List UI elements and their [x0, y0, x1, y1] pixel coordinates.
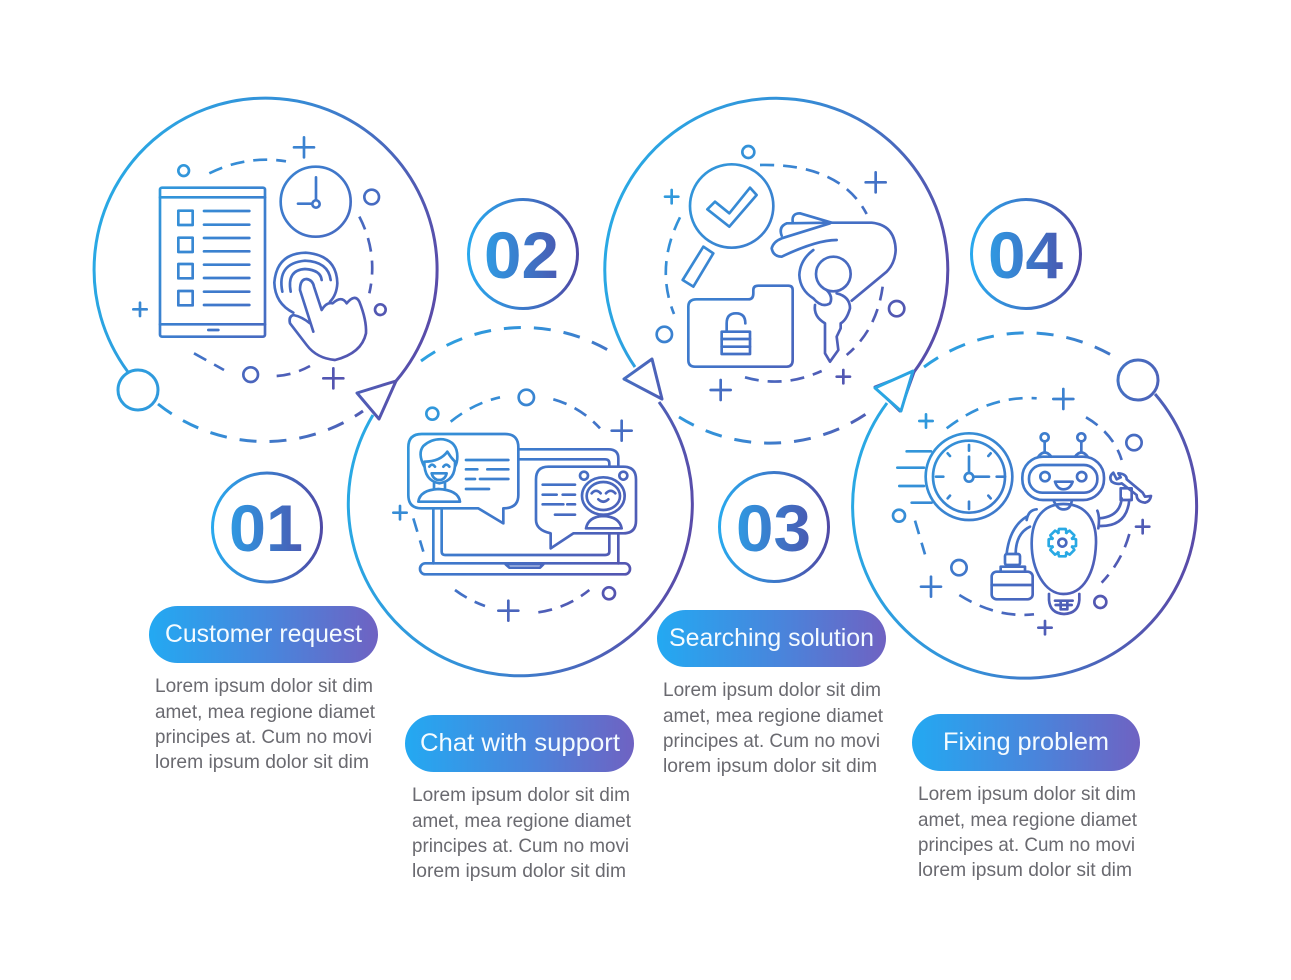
number badge 03: 03: [736, 491, 811, 565]
text block: step 2 description: Lorem ipsum dolor sit dim: [412, 784, 630, 806]
text block: step 2 description: principes at. Cum no movi: [412, 835, 629, 857]
pill: fixing problem: Fixing problem: [943, 728, 1109, 756]
icon: laptop chat: [393, 390, 636, 621]
number badge 01: 01: [229, 491, 303, 565]
panel: step 1 customer request: [94, 98, 437, 773]
arrow: step 4: [875, 371, 913, 411]
text block: step 4 description: amet, mea regione diamet: [918, 809, 1138, 831]
arrow: step 1: [357, 381, 396, 419]
text block: step 3 description: amet, mea regione diamet: [663, 705, 884, 727]
text block: step 2 description: amet, mea regione diamet: [412, 810, 632, 832]
ring: step 2: [348, 328, 692, 676]
number badge 02: 02: [484, 218, 559, 292]
text block: step 4 description: Lorem ipsum dolor sit dim: [918, 783, 1136, 805]
text block: step 1 description: lorem ipsum dolor sit dim: [155, 751, 369, 773]
number badge 01: [212, 473, 322, 582]
text block: step 3 description: [663, 679, 884, 777]
panel: step 4 fixing problem: [853, 200, 1197, 881]
pill: searching solution: [657, 610, 886, 667]
text block: step 3 description: lorem ipsum dolor sit dim: [663, 755, 877, 777]
text block: step 1 description: amet, mea regione diamet: [155, 701, 376, 723]
panel: step 2 chat with support: [348, 200, 692, 882]
text block: step 4 description: principes at. Cum no movi: [918, 834, 1135, 856]
text block: step 1 description: Lorem ipsum dolor sit dim: [155, 675, 373, 697]
pill: customer request: Customer request: [165, 620, 362, 648]
text block: step 2 description: [412, 784, 632, 882]
text block: step 4 description: [918, 783, 1138, 881]
number badge 04: 04: [988, 218, 1063, 292]
icon: tablet checklist, clock and tapping hand: [133, 137, 386, 388]
pill: chat with support: Chat with support: [420, 729, 620, 757]
text block: step 1 description: principes at. Cum no movi: [155, 726, 372, 748]
pill: fixing problem: [912, 714, 1140, 771]
number badge 03: [720, 472, 828, 582]
pill: chat with support: [405, 715, 634, 772]
text block: step 4 description: lorem ipsum dolor sit dim: [918, 859, 1132, 881]
ring: step 4: [853, 333, 1197, 678]
arrow: step 3: [875, 372, 914, 411]
pill: customer request: [149, 606, 378, 663]
text block: step 2 description: lorem ipsum dolor sit dim: [412, 860, 626, 882]
ring: step 1: [94, 98, 437, 442]
pill: searching solution: Searching solution: [669, 624, 874, 652]
text block: step 1 description: [155, 675, 376, 773]
number badge 02: [468, 200, 578, 308]
text block: step 3 description: Lorem ipsum dolor sit dim: [663, 679, 881, 701]
text block: step 3 description: principes at. Cum no movi: [663, 730, 880, 752]
ring: step 3: [605, 98, 948, 443]
panel: step 3 searching solution: [605, 98, 948, 777]
icon: robot with clock and tools: [893, 389, 1151, 634]
arrow: step 2: [624, 359, 662, 399]
number badge 04: [972, 200, 1080, 308]
icon: magnifier, hand with key and locked folder: [657, 146, 904, 400]
